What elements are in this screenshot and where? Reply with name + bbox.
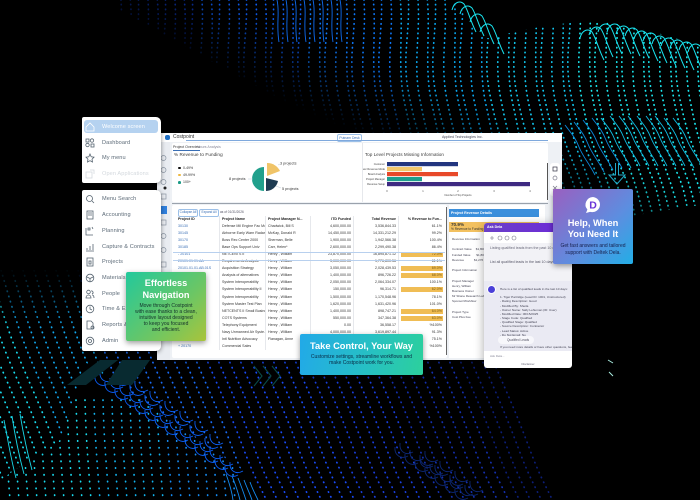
chart scrollbar — [546, 163, 548, 200]
data table: System Interoperability — [222, 295, 259, 299]
data table: 20101.01.03 — [178, 287, 198, 291]
pie chart: 5 projects — [282, 187, 299, 191]
data table: 2,028,439.53 — [375, 266, 396, 270]
chat panel: Ask Dela — [484, 223, 572, 368]
data table: 1,776,800.56 — [375, 259, 396, 263]
background: dim teal shapes — [67, 360, 150, 385]
data table: 99.2% — [432, 231, 442, 235]
pie legend — [178, 166, 195, 184]
data table: COTS Systems — [222, 316, 247, 320]
data table: + 20115 — [178, 337, 191, 341]
data table: Henry , William — [268, 330, 292, 334]
bar chart heading: Top Level Projects Missing Information — [365, 152, 444, 156]
data table: 2,050,000.00 — [330, 280, 351, 284]
data table: 3,619,897.44 — [375, 330, 396, 334]
table panel — [172, 205, 447, 358]
data table: 36,558.17 — [380, 323, 396, 327]
data table: 20101.01.01.AB.01S — [178, 266, 211, 270]
callout body — [311, 354, 412, 366]
detail header — [449, 209, 539, 217]
qualified leads chip: Qualified Leads — [507, 338, 529, 342]
table controls: as of 01/31/2026 — [220, 210, 244, 214]
menu item: Materials — [86, 274, 126, 282]
chevrons decoration — [254, 366, 280, 386]
table controls: Collapse All — [180, 210, 196, 214]
solid wave segments — [277, 0, 700, 175]
data table: 20101.01.08 — [178, 323, 198, 327]
callout body: Customize settings, streamline workflows and — [311, 354, 412, 360]
data table: 1,170,548.96 — [375, 295, 396, 299]
callout body — [135, 303, 197, 333]
data table: Sherman, Belle — [268, 238, 293, 242]
menu item: Planning: Planning — [102, 228, 125, 234]
pie legend: 0-49% — [183, 166, 193, 170]
detail banner: 70.9% — [451, 222, 464, 227]
data table: Henry , William — [268, 316, 292, 320]
data table: 2,064,334.07 — [375, 280, 396, 284]
data table: 20101.01.01.AC — [178, 273, 204, 277]
data table: 347,364.38 — [378, 316, 396, 320]
data table: 550,000.00 — [333, 316, 351, 320]
data table: 100.1% — [430, 280, 442, 284]
callout body: make Costpoint work for you. — [329, 360, 394, 366]
data table: 4,000,000.00 — [330, 330, 351, 334]
user prompt bubble — [484, 243, 572, 281]
background: wave ridges — [95, 371, 483, 499]
menu item: Admin: Admin — [102, 338, 118, 344]
callout body: support with Deltek Dela. — [565, 250, 621, 256]
data table: 1,900,000.00 — [330, 238, 351, 242]
menu item: Accounting: Accounting — [102, 212, 131, 218]
window header — [157, 133, 562, 142]
sidebar icons — [160, 155, 167, 268]
callout body: with ease thanks to a clean, — [135, 309, 197, 315]
data table: Carr, Helen* — [268, 245, 288, 249]
data table: 1,942,566.38 — [375, 238, 396, 242]
callout heading: Navigation — [143, 290, 189, 300]
data table: Acquisition Strategy — [222, 266, 254, 270]
data table: Henry , William — [268, 287, 292, 291]
logo and app name: Costpoint — [173, 134, 194, 140]
data table: - 20101 — [178, 252, 190, 256]
detail panel — [449, 205, 545, 358]
menu item: Reports: Reports & Gov — [102, 322, 140, 328]
data table: 30145 — [178, 231, 188, 235]
chat header: Ask Dela — [487, 225, 502, 229]
data table: System Interoperability — [222, 280, 259, 284]
data table: 1,631,420.96 — [375, 302, 396, 306]
header buttons: Putnam Desk — [339, 136, 360, 140]
company selector: Applied Technologies Inc. — [442, 135, 483, 139]
menu item: Capture & Contracts — [86, 244, 155, 252]
callout body — [560, 242, 626, 256]
bar chart panel — [362, 143, 549, 202]
chat toolbar — [490, 236, 516, 240]
data table: 3,050,000.00 — [330, 266, 351, 270]
tabs: Project Overview — [173, 144, 200, 148]
callout heading — [143, 278, 189, 300]
data table: 72.0% — [432, 252, 442, 256]
tab 2: Hours Analysis — [197, 144, 221, 148]
table row highlight — [173, 252, 445, 260]
bar chart: Project Manager — [366, 177, 385, 181]
welcome highlight — [84, 120, 158, 133]
data table: 1,400,000.00 — [330, 273, 351, 277]
data table: 2,299,490.38 — [375, 245, 396, 249]
data table: Henry , William — [268, 266, 292, 270]
data table: 68.0% — [432, 273, 442, 277]
data table: 100.4% — [430, 238, 442, 242]
data table: Henry , William — [268, 309, 292, 313]
data table: Intl Nutrition Advocacy — [222, 337, 258, 341]
data table: 30185 — [178, 245, 188, 249]
detail labels: Revenue Information Contract Value $1,800 Funded Value $1,800 Revenue $1,276 Project Information Project Manager Henry, William Business Owner Mr Shane Research Lab Sponsor/Workflow Project Type Cost Plus Fee — [452, 237, 485, 319]
menu item: Projects — [86, 258, 123, 266]
data table: Analysis of alternatives — [222, 273, 259, 277]
data table: 1,000,000.00 — [330, 337, 351, 341]
right tools strip — [550, 163, 560, 196]
chat input: Ask Dela... — [490, 354, 505, 358]
data table: Total Revenue — [372, 216, 396, 220]
menu item: Projects: Projects — [102, 259, 123, 265]
bar chart: Customer — [374, 162, 385, 166]
data table: 62.0% — [432, 287, 442, 291]
pie chart — [229, 162, 299, 191]
left sidebar — [157, 142, 170, 360]
icon: Dela speech bubble — [586, 197, 600, 213]
menu item: My menu — [85, 153, 126, 163]
data table: 20101.01.01.AA — [178, 259, 204, 263]
detail banner — [449, 222, 539, 232]
data table: Base Ops Support Univ — [222, 245, 260, 249]
data table: 64.0% — [432, 309, 442, 313]
icon: Dela speech bubble: D — [589, 200, 597, 212]
data table: 896,726.22 — [378, 273, 396, 277]
data table: 20101.01.06 — [178, 309, 198, 313]
callout heading: Help, When — [568, 218, 618, 228]
data table: System Interoperability II — [222, 287, 262, 291]
callout body: Move through Costpoint — [139, 303, 193, 309]
callout body: and efficient. — [152, 327, 180, 333]
data table: 3,536,844.33 — [375, 224, 396, 228]
callout body: Get fast answers and tailored — [560, 242, 626, 248]
overview panel — [172, 143, 548, 202]
data table: 30130 — [178, 224, 188, 228]
data table: Henry , William — [268, 259, 292, 263]
data table: Henry , William — [268, 323, 292, 327]
data table: %100% — [430, 323, 442, 327]
bar chart: Number of Top Projects — [444, 193, 472, 197]
data table: 91.3% — [432, 330, 442, 334]
tool icons — [552, 166, 558, 190]
menu item: Accounting — [86, 210, 131, 220]
data table: 30170 — [178, 238, 188, 242]
table controls — [178, 209, 244, 217]
data table: Airborne Early Warn Radar — [222, 231, 265, 235]
bar chart: Revenue Setup — [367, 182, 386, 186]
data table: Henry , William — [268, 295, 292, 299]
data table: 0.00 — [344, 323, 351, 327]
data table: Project Manager N... — [268, 216, 303, 220]
table scrollbar — [446, 207, 447, 355]
bar chart: 2 — [457, 189, 459, 193]
menu item: Admin — [86, 336, 118, 346]
data table: Project ID — [178, 216, 195, 220]
data table: 20101.01.04 — [178, 295, 198, 299]
data table: Chadwick, Bill S — [268, 224, 294, 228]
data table: 78.1% — [432, 295, 442, 299]
bar chart: 0 — [386, 189, 388, 193]
data table: % Revenue to Fun... — [408, 216, 442, 220]
detail header: Project Revenue Details — [451, 211, 492, 215]
data table: 4,600,000.00 — [330, 224, 351, 228]
data table — [178, 216, 443, 350]
header buttons — [337, 134, 362, 142]
background: lower dot wave — [0, 260, 560, 500]
follow-up text: List all qualified leads in the last 10 days — [490, 260, 554, 264]
icon: down arrow — [608, 163, 626, 185]
data table: Henry , William — [268, 252, 292, 256]
data table: 61.1% — [432, 224, 442, 228]
callout heading — [568, 218, 618, 239]
callout heading: Effortless — [145, 278, 187, 288]
divider — [172, 202, 548, 204]
bar chart — [363, 162, 531, 197]
menu item: Welcome screen: Welcome screen — [102, 124, 145, 130]
data table: 150,000.00 — [333, 287, 351, 291]
table controls: Expand All — [201, 210, 217, 214]
callout: Take Control — [300, 334, 423, 375]
menu item: Welcome screen — [86, 122, 145, 132]
data table: 14,331,212.29 — [373, 231, 396, 235]
bright crest lines — [452, 2, 700, 74]
data table: Flanagan, Anne — [268, 337, 293, 341]
data table: 96,314.71 — [380, 287, 396, 291]
menu item: Time & Expense — [86, 304, 144, 314]
data table: 69.0% — [432, 266, 442, 270]
bar chart: 1 — [422, 189, 424, 193]
callout heading: You Need It — [568, 229, 618, 239]
menu item: Open Applications: Open Applications — [102, 171, 149, 177]
data table: ITD Funded — [331, 216, 351, 220]
data table: 0.00 — [344, 344, 351, 348]
data table: 20101.01.09 — [178, 330, 198, 334]
data table: %100% — [430, 344, 442, 348]
data table: NETCENTS II — [222, 252, 244, 256]
menu item: Dashboard — [85, 138, 130, 148]
pie legend: 100+ — [183, 180, 191, 184]
pie chart: 3 projects — [280, 162, 297, 166]
data table: 75.1% — [432, 337, 442, 341]
data table: 20101.01.05 — [178, 302, 198, 306]
callout body: intuitive layout designed — [139, 315, 193, 321]
menu item: Menu Search: Menu Search — [102, 196, 136, 202]
bar chart: 4 — [529, 189, 531, 193]
prompt text: Listing qualified leads from the past 10 days... — [490, 246, 563, 250]
callout body: to keep you focused — [144, 321, 188, 327]
data table: Project Name — [222, 216, 245, 220]
menu item: Time & Expense: Time & Expense — [102, 306, 144, 312]
data table: 23,870,000.00 — [328, 252, 351, 256]
data table: 32,950.00 — [380, 344, 396, 348]
response panel — [484, 281, 572, 351]
menu item: Dashboard: Dashboard — [102, 140, 130, 146]
application window — [157, 133, 562, 360]
disclaimer: Disclaimer — [521, 362, 535, 366]
data table: 14,450,000.00 — [328, 231, 351, 235]
menu item: Reports — [86, 320, 140, 330]
qualified leads chip — [498, 336, 534, 344]
data table: Telephony Equipment — [222, 323, 257, 327]
detail banner: % Revenue to Funding — [451, 227, 483, 231]
data table: 16,895,871.12 — [373, 252, 396, 256]
menu item: Capture & Contracts: Capture & Contracts — [102, 244, 155, 250]
data table: 101.0% — [430, 302, 442, 306]
menu item: Materials: Materials — [102, 275, 126, 281]
corner marks near chat — [608, 360, 614, 376]
data table: 20101.01.02 — [178, 280, 198, 284]
pie heading: % Revenue to Funding — [174, 152, 223, 157]
menu item: Menu Search — [86, 195, 136, 204]
data table: 2,600,000.00 — [330, 245, 351, 249]
tabs — [173, 144, 200, 150]
data table: System Master Test Plan — [222, 302, 262, 306]
data table: 61.1% — [432, 259, 442, 263]
menu item: Open Applications — [86, 170, 149, 178]
data table: 751,500.00 — [378, 337, 396, 341]
menu panel: main — [82, 190, 161, 351]
progress line — [186, 140, 548, 141]
data table: Commercial Sales — [222, 344, 251, 348]
callout heading: Take Control, Your Way — [310, 341, 413, 351]
data table: Henry , William — [268, 302, 292, 306]
data table: 3,000,000.00 — [330, 259, 351, 263]
pie legend: 49-99% — [183, 172, 195, 176]
Dela avatar — [487, 285, 496, 294]
data table: 898,747.21 — [378, 309, 396, 313]
menu item: My menu: My menu — [102, 155, 126, 161]
bar chart: Board Analysis — [368, 172, 386, 176]
data table: 20101.01.07 — [178, 316, 198, 320]
data table: 1,620,000.00 — [330, 302, 351, 306]
data table: Boss Rec Center 2000 — [222, 238, 258, 242]
callout: Effortless Navigation — [126, 272, 206, 341]
data table: 86.4% — [432, 245, 442, 249]
data table: 1,400,000.00 — [330, 309, 351, 313]
menu item: Planning — [86, 226, 125, 236]
callout: Help When You Need It — [553, 189, 633, 264]
data table: 1,500,000.00 — [330, 295, 351, 299]
data table: McKay, Donald R — [268, 231, 296, 235]
menu item: People — [86, 290, 120, 298]
data table: Requirements Analysis — [222, 259, 259, 263]
data table: Henry , William — [268, 280, 292, 284]
menu item: People: People — [102, 291, 120, 297]
pie chart: 8 projects — [229, 177, 246, 181]
data table: Henry , William — [268, 273, 292, 277]
bar chart: 3 — [493, 189, 495, 193]
data table: 63.0% — [432, 316, 442, 320]
menu panel: top — [82, 117, 161, 183]
solid lower segments — [4, 414, 258, 500]
data table: + 20170 — [178, 344, 191, 348]
chat header — [484, 223, 572, 232]
